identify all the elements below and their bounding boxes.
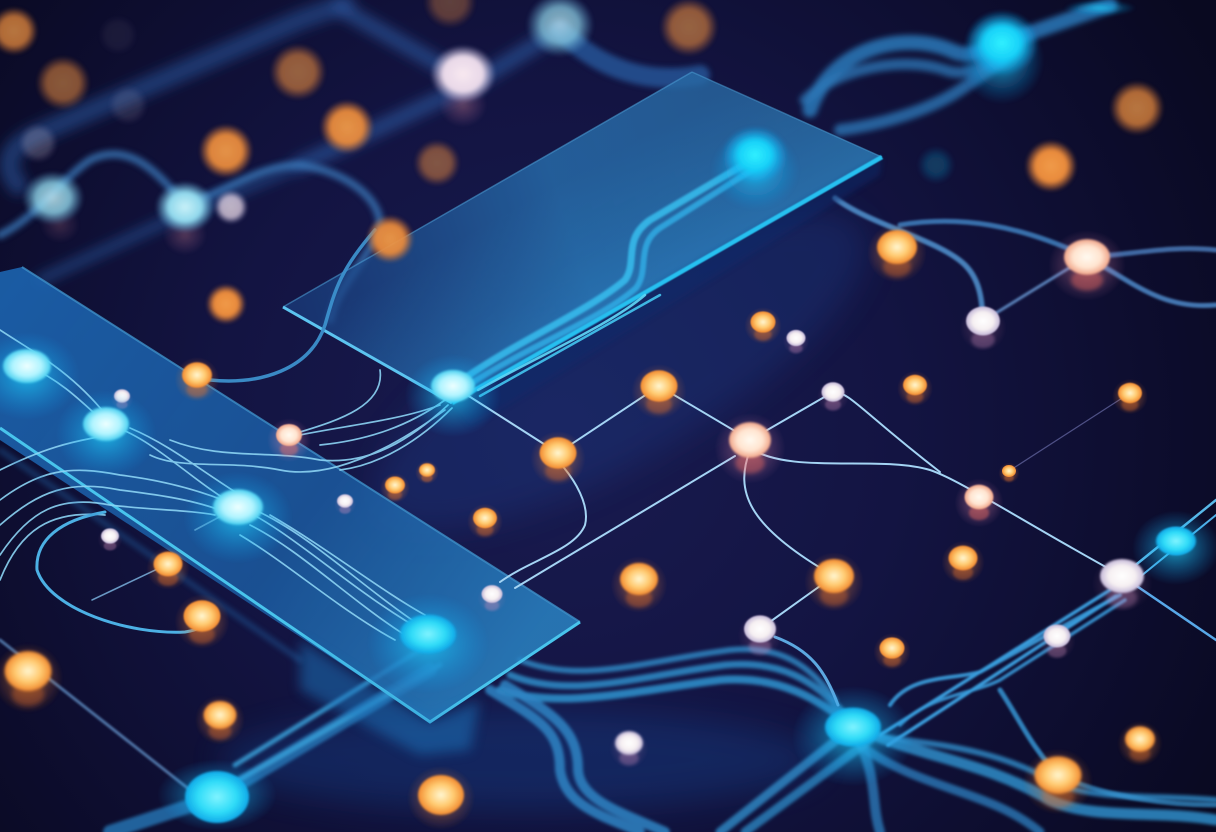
glass panel: lower left — [0, 267, 580, 755]
background soft glow — [220, 152, 907, 810]
slightly soft nodes: foreground — [0, 643, 1163, 830]
circuit lines: central network — [453, 386, 1216, 705]
blurred traces: top left — [9, 4, 560, 280]
sharp nodes: left and centre — [97, 357, 507, 649]
glass panel: upper — [283, 72, 882, 425]
panel shadow — [452, 157, 882, 425]
thin traces on lower left panel — [0, 330, 452, 640]
bottom right trace bundle — [880, 590, 1216, 805]
mid right traces — [835, 198, 1216, 321]
cyan node: right edge — [1132, 510, 1216, 585]
traces on upper panel — [465, 158, 755, 396]
blurred bright nodes: top — [22, 0, 1136, 255]
blurred traces: top right — [805, 5, 1110, 130]
loop trace — [37, 230, 375, 632]
panel under glow — [300, 640, 480, 755]
bright cyan nodes on the glass — [0, 332, 915, 831]
bottom-left diagonal traces — [0, 450, 300, 790]
faint thin lines right — [92, 393, 1130, 600]
blurred traces: bottom centre and right — [110, 649, 1216, 832]
soft trace: upper left loop — [0, 30, 700, 320]
blurred nodes: upper background — [0, 0, 1164, 324]
sharp nodes: central network — [530, 223, 1153, 670]
